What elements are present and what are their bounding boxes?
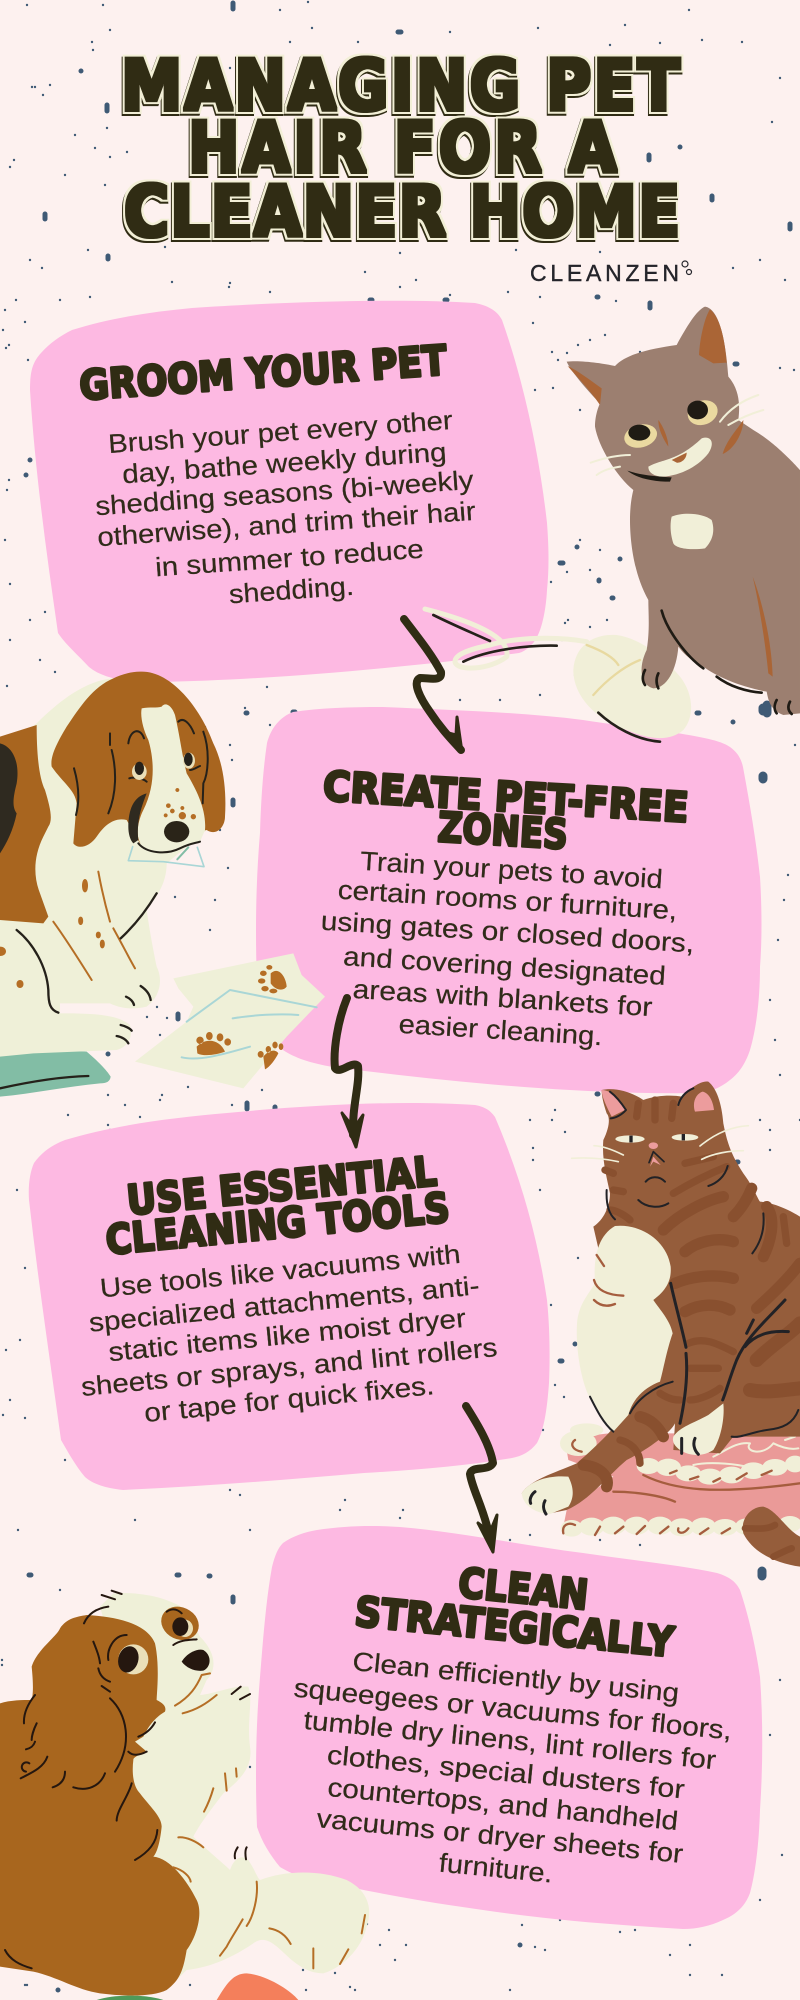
icon: beagle dog with paper in mouth bbox=[0, 672, 225, 1097]
title: CLEANER HOME bbox=[124, 171, 680, 253]
body: groom your pet: Brush your pet every other bbox=[107, 405, 454, 459]
panel: groom your pet background bbox=[30, 301, 548, 682]
heading: create pet-free zones: ZONES bbox=[437, 803, 569, 859]
body: groom your pet: shedding. bbox=[228, 571, 355, 609]
body: create pet-free zones: and covering designated bbox=[342, 941, 667, 991]
body: create pet-free zones: Train your pets to avoid bbox=[359, 846, 664, 894]
body: clean strategically bbox=[292, 1646, 733, 1889]
text block: create pet-free zones bbox=[320, 762, 695, 1051]
body: use essential cleaning tools: static items like moist dryer bbox=[107, 1303, 467, 1367]
body: groom your pet bbox=[94, 405, 477, 609]
heading: clean strategically: STRATEGICALLY bbox=[353, 1588, 677, 1667]
icon: grey cat sitting bbox=[567, 307, 800, 715]
body: groom your pet: day, bathe weekly during bbox=[121, 437, 448, 489]
heading: create pet-free zones bbox=[322, 762, 690, 859]
heading: clean strategically bbox=[353, 1559, 677, 1667]
title: MANAGING PET bbox=[121, 45, 680, 127]
body: use essential cleaning tools: Use tools like vacuums with bbox=[99, 1239, 462, 1303]
title: HAIR FOR A bbox=[188, 107, 617, 189]
icon: tabby cat on pink cushion bbox=[522, 1081, 800, 1567]
arrow: pet-free zones to cleaning tools bbox=[335, 998, 363, 1147]
heading: use essential cleaning tools bbox=[104, 1147, 452, 1264]
body: create pet-free zones: areas with blankets for bbox=[352, 974, 653, 1022]
heading: clean strategically: CLEAN bbox=[456, 1559, 590, 1619]
title bbox=[121, 45, 680, 253]
text block: clean strategically bbox=[292, 1559, 733, 1889]
icon: cavalier spaniel dog bbox=[0, 1591, 369, 2000]
body: clean strategically: furniture. bbox=[438, 1848, 554, 1889]
body: use essential cleaning tools: or tape for quick fixes. bbox=[143, 1370, 435, 1428]
text block: groom your pet bbox=[78, 336, 477, 609]
body: create pet-free zones: easier cleaning. bbox=[398, 1009, 603, 1051]
panel: create pet-free zones background bbox=[256, 707, 762, 1093]
heading: groom your pet: GROOM YOUR PET bbox=[78, 336, 448, 410]
panel: use essential cleaning tools background bbox=[29, 1103, 550, 1490]
arrow: groom to pet-free zones bbox=[404, 619, 462, 752]
body: clean strategically: countertops, and handheld bbox=[326, 1772, 680, 1836]
heading: use essential cleaning tools: USE ESSENTIAL bbox=[125, 1147, 439, 1225]
logo: CLEANZEN: CLEANZEN bbox=[530, 260, 679, 286]
body: clean strategically: tumble dry linens, lint rollers for bbox=[302, 1705, 718, 1775]
body: use essential cleaning tools bbox=[80, 1239, 499, 1428]
body: create pet-free zones bbox=[320, 846, 695, 1051]
panel: clean strategically background bbox=[256, 1526, 762, 1929]
body: clean strategically: Clean efficiently by using bbox=[351, 1646, 681, 1708]
body: create pet-free zones: certain rooms or furniture, bbox=[337, 875, 678, 925]
arrow: cleaning tools to clean strategically bbox=[466, 1406, 497, 1552]
text block: use essential cleaning tools bbox=[80, 1147, 499, 1428]
body: create pet-free zones: using gates or closed doors, bbox=[320, 906, 695, 958]
body: use essential cleaning tools: specialized attachments, anti- bbox=[88, 1270, 481, 1338]
body: clean strategically: vacuums or dryer sheets for bbox=[315, 1803, 685, 1869]
body: clean strategically: clothes, special dusters for bbox=[326, 1740, 686, 1805]
body: groom your pet: otherwise), and trim their hair bbox=[96, 496, 477, 552]
heading: create pet-free zones: CREATE PET-FREE bbox=[322, 762, 690, 832]
heading: use essential cleaning tools: CLEANING TOOLS bbox=[104, 1184, 452, 1264]
body: use essential cleaning tools: sheets or sprays, and lint rollers bbox=[80, 1332, 499, 1402]
icon: paper with muddy paw prints bbox=[135, 953, 325, 1088]
body: groom your pet: shedding seasons (bi-weekly bbox=[94, 465, 475, 521]
body: groom your pet: in summer to reduce bbox=[154, 534, 425, 582]
icon: cream mouse toy with tail bbox=[425, 609, 691, 742]
body: clean strategically: squeegees or vacuums for floors, bbox=[292, 1673, 733, 1745]
